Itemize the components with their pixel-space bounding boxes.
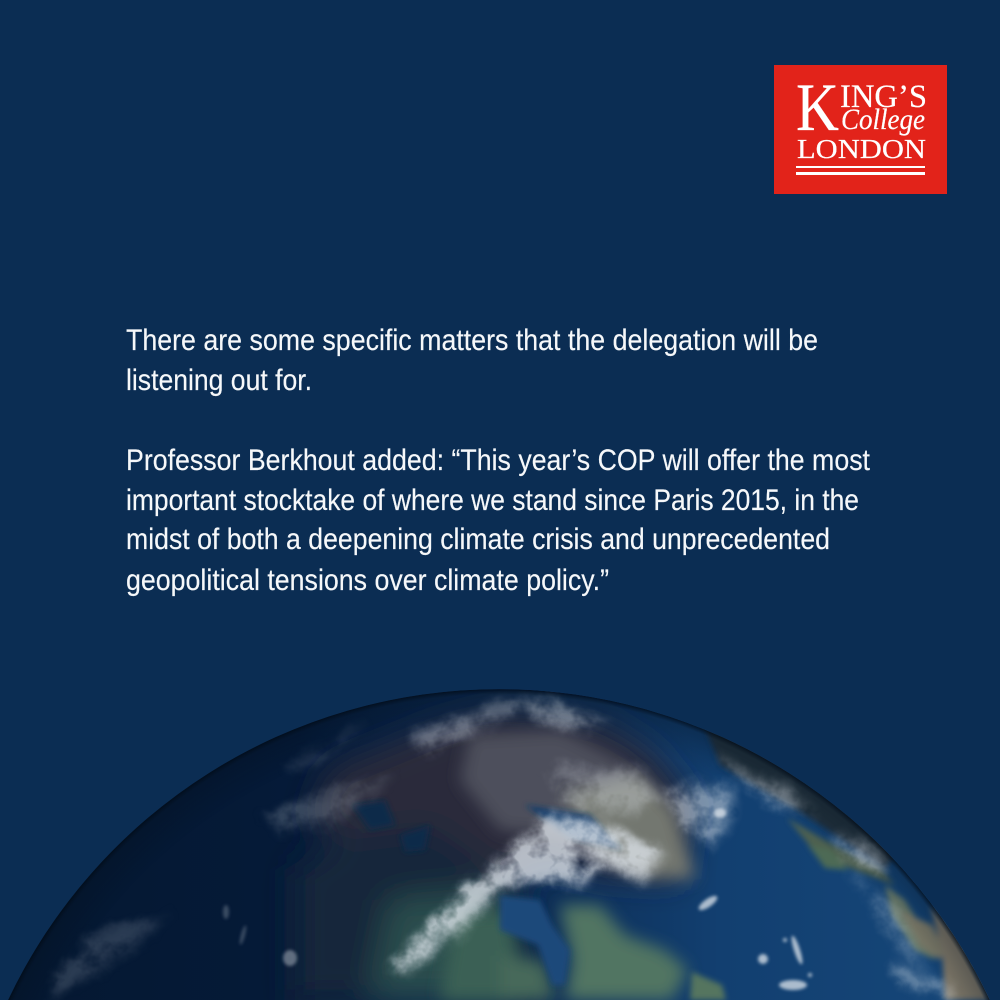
clouds: small specks over ocean [223, 808, 812, 990]
text block: quote: midst of both a deepening climate crisis and unprecedented [126, 523, 830, 556]
logo: King's College London: LONDON [797, 134, 926, 164]
limb shading [8, 689, 990, 1000]
land: northern coast on the right [690, 715, 990, 1000]
logo: King's College London: ING’S [840, 79, 927, 115]
text block: quote: important stocktake of where we stand since Paris 2015, in the [126, 484, 859, 517]
logo: King's College London [774, 65, 947, 194]
land: dark western continent [295, 710, 690, 1000]
text block: quote [126, 444, 871, 597]
text block: intro: There are some specific matters that the delegation will be [126, 324, 818, 357]
logo: King's College London: College [841, 103, 925, 136]
text block: quote: Professor Berkhout added: “This year’s COP will offer the most [126, 444, 871, 477]
ocean: bays [352, 800, 622, 985]
text block: quote: geopolitical tensions over climate policy.” [126, 564, 609, 597]
logo: King's College London: K [796, 69, 839, 145]
land: polar and central masses [440, 730, 695, 1000]
text block: intro [126, 324, 818, 397]
clouds [50, 698, 960, 1000]
earth globe [0, 680, 1000, 1000]
text block: intro: listening out for. [126, 364, 312, 397]
